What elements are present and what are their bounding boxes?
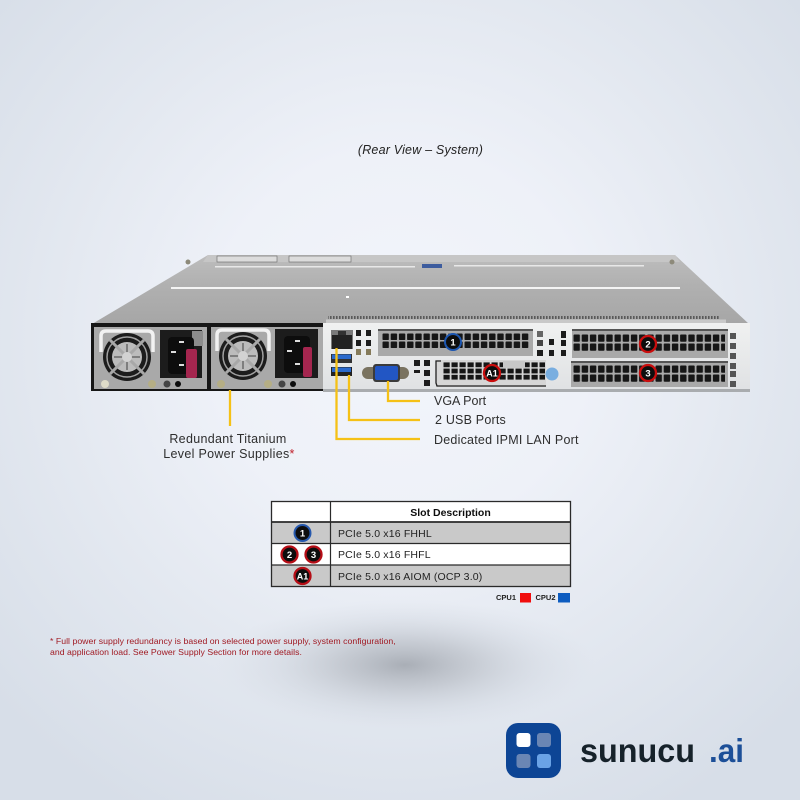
table row 3: PCIe 5.0 x16 AIOM (OCP 3.0) bbox=[338, 571, 482, 583]
label: power supplies: Redundant Titanium bbox=[169, 432, 287, 446]
server chassis bbox=[50, 255, 750, 778]
fan 1 bbox=[103, 333, 151, 381]
USB port upper bbox=[331, 354, 352, 363]
table row 1 bbox=[271, 522, 571, 544]
table badge 1: 1 bbox=[300, 528, 306, 540]
footnote bbox=[50, 636, 396, 657]
badge slot 3: 3 bbox=[645, 368, 651, 380]
badge slot 2: 2 bbox=[645, 340, 651, 350]
CPU legend: CPU2 bbox=[536, 593, 556, 602]
table badge A1 bbox=[294, 568, 310, 584]
leader lines bbox=[230, 348, 420, 439]
fan 2 bbox=[219, 332, 267, 380]
footnote: * Full power supply redundancy is based on selected power supply, system configuration, bbox=[50, 636, 396, 646]
table badge 2: 2 bbox=[287, 550, 292, 561]
rear panel dark back bbox=[91, 323, 324, 391]
label: VGA port: VGA Port bbox=[434, 394, 487, 408]
table header row bbox=[271, 501, 571, 522]
table badge 3 bbox=[306, 546, 322, 562]
table grid bbox=[271, 501, 571, 587]
table header row: Slot Description bbox=[410, 507, 491, 519]
label: power supplies bbox=[163, 432, 295, 461]
badge slot 2 bbox=[640, 336, 656, 352]
slot 3 grille bbox=[571, 361, 728, 387]
small panel cutouts bbox=[356, 330, 736, 387]
mounting ear left bbox=[186, 260, 190, 264]
table row 1: PCIe 5.0 x16 FHHL bbox=[338, 528, 432, 540]
table row 2 bbox=[271, 544, 571, 565]
table row 2: PCIe 5.0 x16 FHFL bbox=[338, 549, 431, 561]
caption: rear view: (Rear View – System) bbox=[358, 143, 483, 157]
power supply 1 bbox=[94, 327, 207, 389]
mounting ear right bbox=[670, 260, 674, 264]
table badge 1 bbox=[294, 525, 310, 541]
CPU legend: CPU1 bbox=[496, 593, 516, 602]
logo icon bbox=[506, 723, 561, 778]
logo wordmark: .ai bbox=[709, 732, 744, 769]
power supply 2 bbox=[211, 327, 323, 389]
badge slot A1 bbox=[484, 365, 500, 381]
label: IPMI LAN port: Dedicated IPMI LAN Port bbox=[434, 433, 579, 447]
badge slot 1 bbox=[445, 334, 461, 350]
footnote: and application load. See Power Supply Section for more details. bbox=[50, 647, 302, 657]
table badge 3: 3 bbox=[311, 550, 316, 561]
power socket 2 bbox=[275, 329, 318, 378]
badge slot 3 bbox=[640, 365, 656, 381]
IPMI LAN port bbox=[331, 330, 353, 349]
badge slot A1: A1 bbox=[486, 368, 498, 378]
slot 1 grille bbox=[378, 329, 533, 356]
label: USB ports: 2 USB Ports bbox=[435, 413, 506, 427]
label: power supplies: Level Power Supplies* bbox=[163, 447, 295, 461]
slot 2 grille bbox=[572, 329, 728, 358]
power socket 1 bbox=[160, 330, 203, 378]
badge slot 1: 1 bbox=[450, 338, 456, 348]
VGA port bbox=[362, 364, 409, 382]
USB port lower bbox=[331, 367, 352, 376]
floor shadow bbox=[215, 599, 595, 731]
I/O panel bbox=[323, 323, 750, 392]
AIOM slot grille bbox=[436, 360, 546, 387]
chassis top cover bbox=[92, 255, 749, 324]
table row 3 bbox=[271, 565, 571, 587]
table badge A1: A1 bbox=[297, 572, 308, 582]
slot description table bbox=[271, 501, 571, 587]
logo wordmark: sunucu bbox=[580, 732, 695, 769]
table badge 2 bbox=[282, 546, 298, 562]
CPU legend bbox=[496, 593, 570, 602]
thumbscrew bbox=[546, 368, 558, 380]
